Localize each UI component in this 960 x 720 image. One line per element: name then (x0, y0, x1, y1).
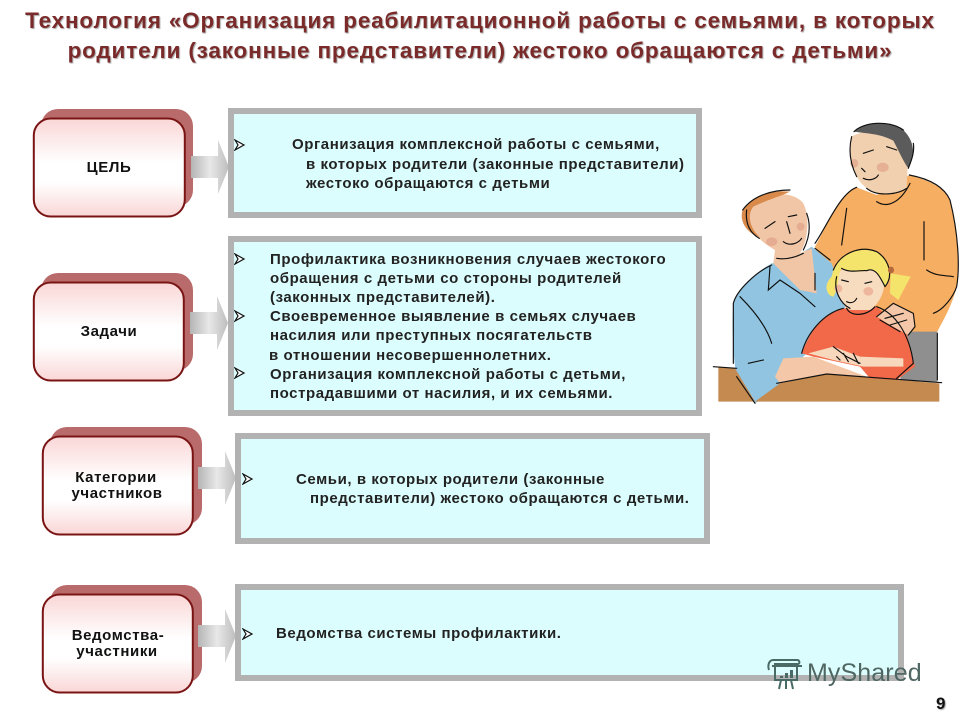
child arms (808, 347, 903, 367)
text block: обращения с детьми со стороны родителей (270, 270, 622, 287)
bullet (242, 473, 254, 485)
panel: agencies label (42, 585, 202, 694)
child head (836, 264, 884, 310)
panel: goal label: ЦЕЛЬ (87, 159, 131, 176)
table (718, 367, 939, 402)
bullet (234, 139, 246, 151)
panel: agencies label: участники (76, 643, 158, 660)
grandfather head (850, 132, 908, 195)
text block (269, 251, 666, 402)
text block (292, 136, 685, 192)
grandfather hair (854, 123, 913, 168)
text block: Семьи, в которых родители (законные (296, 471, 605, 488)
child body (802, 307, 915, 380)
panel: participants label (42, 427, 202, 536)
arrow: participants (198, 451, 235, 504)
watermark: MyShared (767, 659, 922, 690)
ink lines (713, 123, 958, 403)
grandfather trousers (900, 330, 937, 382)
title: Технология «Организация реабилитационной работы с семьями, в которых (25, 8, 935, 33)
text block (296, 471, 690, 507)
text block: насилия или преступных посягательств (270, 327, 593, 344)
watermark: MyShared: MyShared (807, 659, 922, 687)
panel: tasks label: Задачи (81, 323, 137, 340)
text block: Ведомства системы профилактики. (276, 625, 562, 642)
text block: Своевременное выявление в семьях случаев (270, 308, 636, 325)
child hair (826, 249, 890, 297)
panel: agencies label: Ведомства- (72, 627, 164, 644)
father shirt (733, 247, 847, 403)
icon: presentation board (767, 659, 802, 690)
panel: participants label: Категории (75, 469, 157, 486)
panel: tasks label (32, 273, 193, 382)
father arm (775, 357, 867, 383)
panel: participants label: участников (71, 485, 163, 502)
text block: Организация комплексной работы с детьми, (270, 366, 626, 383)
text block: (законных представителей). (270, 289, 495, 306)
text block: Профилактика возникновения случаев жестокого (270, 251, 666, 268)
text block: пострадавшими от насилия, и их семьями. (270, 385, 613, 402)
panel: goal label (32, 109, 193, 218)
panel: goal text (228, 108, 702, 218)
text block: Организация комплексной работы с семьями, (292, 136, 660, 153)
panel: tasks text (228, 236, 702, 416)
text block: в отношении несовершеннолетних. (269, 347, 552, 364)
grandfather hand (877, 303, 915, 335)
panel: agencies text (235, 584, 904, 681)
arrow: goal (191, 140, 228, 194)
father head and neck (747, 194, 817, 293)
illustration: family (712, 122, 959, 404)
page number: 9 (936, 694, 945, 713)
title (25, 8, 935, 64)
grandfather sweater (815, 175, 958, 332)
text block: жестоко обращаются с детьми (306, 175, 550, 192)
bullets (234, 253, 246, 380)
text block: представители) жестоко обращаются с детьми. (310, 490, 690, 507)
panel: participants text (235, 433, 710, 544)
arrow: tasks (190, 296, 228, 350)
title: родители (законные представители) жестоко обращаются с детьми» (68, 38, 892, 63)
bullet (242, 628, 254, 640)
text block: в которых родители (законные представители) (306, 156, 685, 173)
father hair (742, 191, 790, 237)
arrow: agencies (198, 609, 235, 662)
